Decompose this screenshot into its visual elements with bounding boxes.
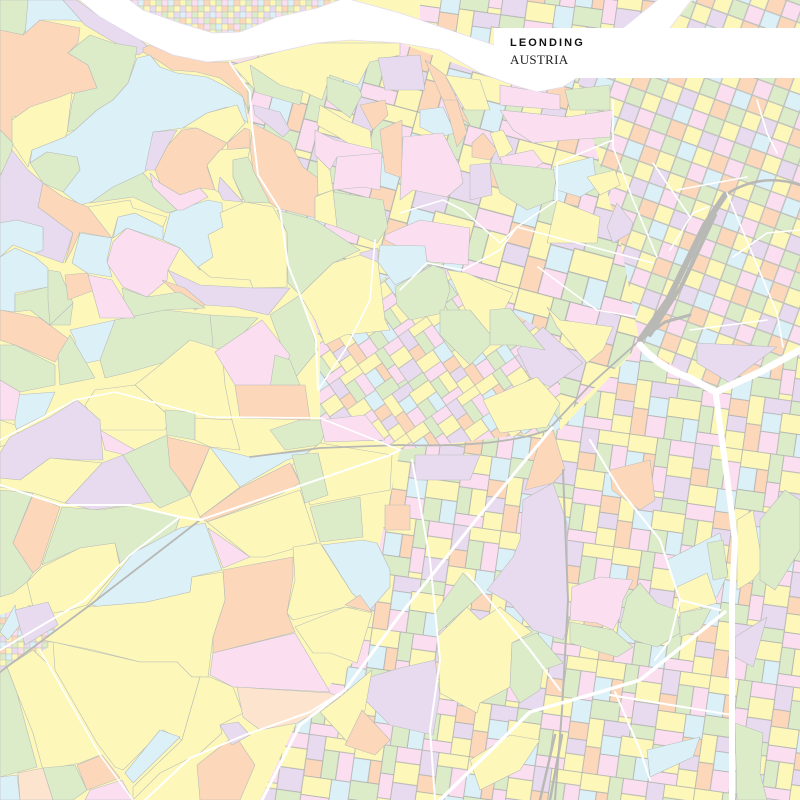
motorway [716,395,735,800]
road: south diagonal [262,428,552,800]
district: far west hamlet [0,600,60,670]
district: south [260,345,800,800]
district: central [320,260,560,450]
road: cross [467,573,732,780]
road: upper west [400,140,613,243]
motorway junction [640,345,800,392]
parcels: north-west lower [0,270,385,455]
railway [0,180,800,800]
river danube [77,0,693,92]
road: south-west curve [40,650,133,800]
road: west east [0,450,400,520]
title panel [494,28,800,78]
road: west upper [0,392,400,450]
road: east curve [412,460,440,800]
road: diagonal lilac [590,440,680,660]
road: west diagonal [0,517,180,650]
district: north bank east [420,0,660,45]
road: upper east network [613,100,800,347]
district: north-east grid [577,78,800,392]
road: north-south [230,63,318,390]
rail line: south [555,470,568,800]
road: south-east arterial [440,612,725,800]
road: centre [318,227,653,390]
rail yard: south [540,735,562,800]
district: north bank strip [127,0,345,33]
rail yard [640,180,800,340]
rail line: south-west [250,340,640,457]
parcels: upper centre [232,43,633,433]
parcels: south-east [320,343,800,800]
parcels: north-west [0,0,360,312]
district: upper centre [230,43,640,450]
road: south-west link [145,690,345,800]
title: city name: LEONDING [510,37,585,49]
parcels: south-west fields [0,400,480,800]
rail line: diagonal [0,520,200,672]
district: top right [670,0,800,28]
subtitle: country: AUSTRIA [510,52,568,67]
river main channel [77,0,693,92]
